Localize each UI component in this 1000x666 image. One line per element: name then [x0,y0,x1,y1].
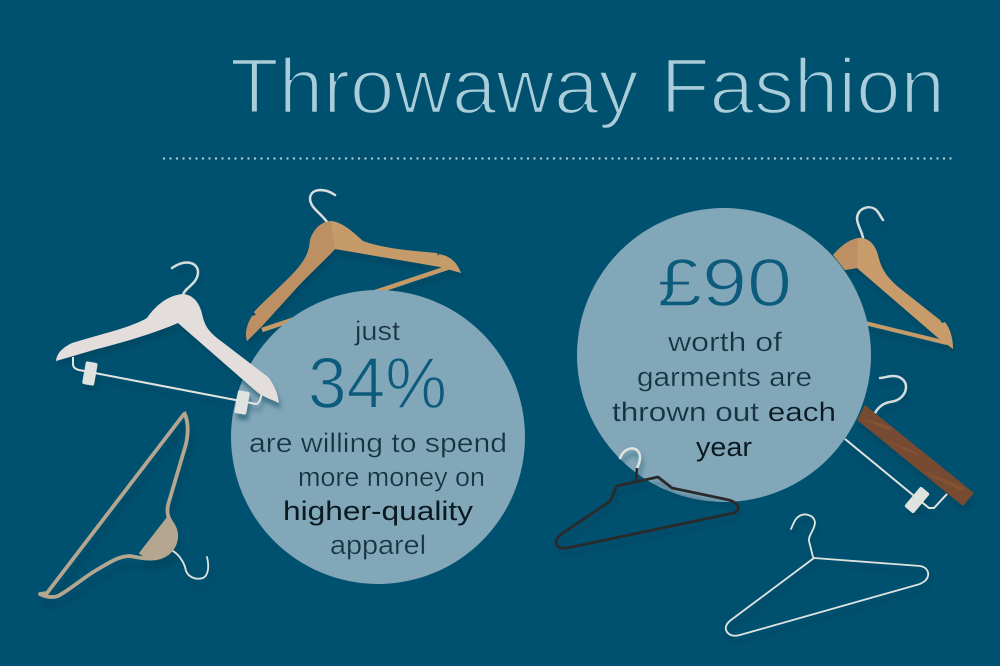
title: Throwaway Fashion [230,42,945,130]
panel: right circle: garments are [637,362,812,392]
text: worth of garments are: worth of [667,327,783,357]
icon: white hanger with clips [56,262,279,415]
panel: left circle [231,290,525,584]
text: are willing to spend more money on: are willing to spend [249,428,507,458]
text: apparel: apparel [330,530,426,560]
text: year: year [696,432,752,462]
icon: wooden hanger right [833,207,953,349]
text: higher-quality: higher-quality [283,496,474,526]
text: just: just [354,316,401,346]
icon: white wire hanger [726,515,928,636]
stat: 34%: 34% [308,344,447,424]
icon: black hanger [556,448,738,548]
icon: beige hanger [40,412,208,597]
icon: brown hanger [845,376,974,514]
text: thrown out each: thrown out each [612,397,836,427]
stat: £90: £90 [657,245,792,321]
panel: right circle [577,207,974,514]
panel: left circle: more money on [298,462,485,492]
icon: wooden hanger top left [246,190,461,341]
